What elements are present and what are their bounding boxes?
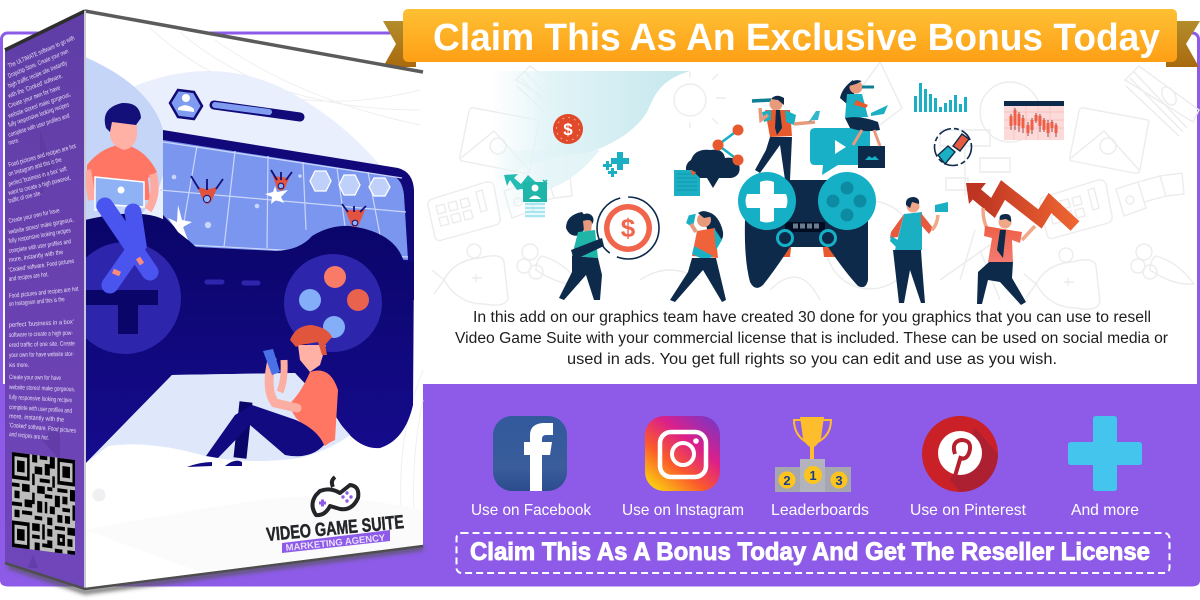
candlestick chart xyxy=(1004,101,1064,140)
center dashes xyxy=(207,282,258,283)
figure: man with megaphone xyxy=(890,197,948,303)
item: Pinterest xyxy=(910,416,1027,519)
label: And more xyxy=(1071,502,1139,519)
icon: profile card with arrow xyxy=(504,174,547,216)
side text: fully responsive looking recipes xyxy=(8,227,71,245)
gamepad illustration xyxy=(738,172,876,288)
progress fill xyxy=(215,105,269,112)
right disc xyxy=(818,172,876,230)
logo subtitle plate xyxy=(282,530,390,553)
side text: complete with user profiles and xyxy=(9,404,73,415)
joystick left xyxy=(778,230,792,246)
laptop man arms xyxy=(87,170,155,210)
right pad circle xyxy=(284,254,382,352)
QR code xyxy=(12,452,75,555)
plus pad xyxy=(85,290,158,334)
side text: perfect 'business in a box' soft xyxy=(8,166,68,188)
ground shadow xyxy=(400,506,416,530)
laptop man legs xyxy=(105,206,150,285)
side text: more, instantly with the xyxy=(9,413,65,424)
heading: Claim This As An Exclusive Bonus Today xyxy=(433,17,1160,59)
chain link icon xyxy=(934,128,972,166)
side text: complete with user profiles and xyxy=(7,112,71,139)
laptop man hair xyxy=(105,103,141,132)
label: Use on Facebook xyxy=(471,502,592,519)
side text: fully responsive looking recipes xyxy=(7,101,70,129)
side text: on Instagram and this is the xyxy=(8,156,63,178)
button coral xyxy=(324,266,346,288)
button blue bottom xyxy=(323,316,345,338)
phone man shirt xyxy=(288,370,338,446)
side text: and recipes are hot. xyxy=(8,271,49,283)
white sparkles xyxy=(168,186,288,240)
illustration: red coin xyxy=(553,114,583,144)
item: Leaderboards: 2 xyxy=(783,473,791,488)
red trend arrow xyxy=(966,183,1075,226)
item: Leaderboards: 1 xyxy=(809,468,817,483)
logo dots xyxy=(341,491,353,503)
dots xyxy=(172,174,302,228)
hexagons xyxy=(310,171,390,196)
side text: with the 'Cooked' software. xyxy=(6,72,64,100)
side text: ies more. xyxy=(9,362,29,369)
side text: Food pictures and recipes are hot xyxy=(8,286,79,300)
body text: In this add on our graphics team have created 30 done for you graphics that you can use to resell xyxy=(473,309,1151,326)
call to action xyxy=(456,533,1170,573)
teal wash lower lobe xyxy=(491,150,600,214)
joystick right xyxy=(820,230,836,246)
figure: woman on video bubble xyxy=(810,80,888,175)
trophy cup xyxy=(800,417,824,468)
figure: man lifting arrow xyxy=(977,208,1035,305)
level hexagon xyxy=(170,90,202,119)
face buttons xyxy=(826,182,866,222)
side text: on Instagram and this is the xyxy=(9,296,65,308)
icon: instagram xyxy=(645,416,720,491)
body text: Video Game Suite with your commercial license that is included. These can be used on social media or xyxy=(455,330,1168,347)
phone man hair xyxy=(290,325,332,355)
figure: man with spyglass xyxy=(752,96,820,180)
orange accents xyxy=(776,240,836,257)
side text: more, instantly with the xyxy=(8,249,64,264)
play triangle xyxy=(835,140,846,154)
phone man arm xyxy=(269,360,297,408)
logo plus xyxy=(319,500,326,506)
side text: website stores! make gorgeous, xyxy=(7,216,74,236)
game screen xyxy=(163,140,408,260)
side text xyxy=(6,35,79,442)
icon: cloud network xyxy=(686,124,744,188)
sitting man on left xyxy=(87,103,157,285)
left blob xyxy=(85,57,166,225)
progress bar xyxy=(214,105,300,117)
side text: fully responsive looking recipes xyxy=(9,394,72,404)
laptop man shirt xyxy=(87,144,157,200)
side text: complete with user profiles and xyxy=(8,238,72,255)
item: Leaderboards: 3 xyxy=(835,473,843,488)
enemy ships xyxy=(191,170,366,227)
light arch xyxy=(134,71,380,219)
podium xyxy=(800,459,825,492)
side text: perfect 'business in a box' xyxy=(9,319,74,329)
button blue left xyxy=(299,289,321,311)
body text: used in ads. You get full rights so you can edit and use as you wish. xyxy=(567,351,1057,368)
phone man head xyxy=(298,345,326,372)
icon: facebook xyxy=(493,416,567,491)
box side face xyxy=(5,12,85,588)
side text: The ULTIMATE software to go with xyxy=(7,35,76,70)
ribbon left tail xyxy=(383,21,416,67)
box top edge side xyxy=(5,11,85,50)
item: And more xyxy=(1068,416,1142,519)
ribbon right tail xyxy=(1166,21,1200,67)
side text: website stores! make gorgeous, xyxy=(7,91,72,120)
icon: dollar target: $ xyxy=(621,213,636,243)
man with phone xyxy=(187,325,338,467)
gamepad dots xyxy=(793,224,819,228)
icon: dollar target xyxy=(597,197,659,259)
dashed box xyxy=(456,533,1170,573)
light pane xyxy=(85,373,350,464)
side text: traffic of one site. xyxy=(8,190,43,205)
avatar xyxy=(178,94,194,112)
teal wash shape behind icons xyxy=(491,71,690,195)
icon: pinterest xyxy=(922,416,998,492)
side text: more. xyxy=(8,137,20,147)
body text xyxy=(455,309,1168,368)
side text: ered traffic of one site. Create xyxy=(9,340,75,349)
product box xyxy=(5,11,423,592)
side text: Create your own for have xyxy=(7,84,62,110)
icon: plus xyxy=(1068,416,1142,491)
image card mountain xyxy=(865,156,879,160)
ribbon banner xyxy=(383,9,1200,67)
side text: Dropship Store. Create your own xyxy=(7,48,70,80)
item: Leaderboards xyxy=(771,417,869,519)
phone xyxy=(263,349,280,375)
box front face xyxy=(85,12,423,588)
call to action text: Claim This As A Bonus Today And Get The Reseller License xyxy=(470,538,1150,566)
side text: Create your own for have xyxy=(8,207,61,225)
item: Instagram xyxy=(622,416,744,519)
side text: 'Cooked' software. Food pictures xyxy=(8,258,75,274)
gamepad body xyxy=(745,180,868,288)
label: Use on Instagram xyxy=(622,502,744,519)
screen grid xyxy=(160,142,408,257)
background doodle pattern xyxy=(428,62,1199,309)
laptop xyxy=(95,177,144,210)
medals xyxy=(804,466,822,484)
laptop man neck and face xyxy=(110,122,137,150)
side text: your own for have website stor- xyxy=(9,351,74,359)
item: Facebook xyxy=(471,416,592,519)
label: Use on Pinterest xyxy=(910,502,1027,519)
plus glyph xyxy=(746,180,788,222)
gamepad light panel xyxy=(785,222,825,232)
logo subtitle: MARKETING AGENCY xyxy=(285,533,386,554)
box vertical corner xyxy=(84,11,86,588)
bar chart icon xyxy=(916,83,966,112)
video bubble xyxy=(810,128,870,175)
ribbon body xyxy=(403,9,1177,62)
purple bottom panel xyxy=(0,384,1200,586)
trophy handles xyxy=(794,420,831,443)
side text: want to create a high powered, xyxy=(7,175,72,197)
logo title: VIDEO GAME SUITE xyxy=(265,512,405,546)
figure: woman with megaphone xyxy=(670,211,726,302)
side text: Food pictures and recipes are hot xyxy=(8,143,77,169)
icon: document xyxy=(674,170,700,196)
front faint arcs xyxy=(150,28,423,530)
controller frame xyxy=(163,130,414,300)
icon: teal plus signs xyxy=(603,152,629,177)
left pad circle xyxy=(86,242,181,354)
illustration: red coin: $ xyxy=(563,120,573,139)
brand logo xyxy=(265,477,405,554)
box top edge front xyxy=(85,11,423,72)
box front artwork xyxy=(86,58,416,553)
side text: and recipes are hot. xyxy=(9,431,49,442)
phone man pants xyxy=(206,405,324,458)
controller lower body xyxy=(85,214,414,464)
box bottom edge xyxy=(5,546,423,589)
side text: high traffic recipe site instantly xyxy=(7,60,69,90)
side text: Create your own for have xyxy=(9,374,61,382)
figure: woman holding magnifier xyxy=(559,212,604,300)
side text: software to create a high pow- xyxy=(9,330,73,339)
phone man back leg xyxy=(240,402,246,458)
plus disc xyxy=(738,172,796,230)
side diamond pattern xyxy=(28,130,60,568)
label: Leaderboards xyxy=(771,502,869,519)
laptop man ankles xyxy=(113,258,142,274)
side text: 'Cooked' software. Food pictures xyxy=(9,422,76,435)
button red xyxy=(347,289,369,311)
box shadow xyxy=(8,548,423,592)
phone man shoes xyxy=(187,461,242,467)
side text: website stores! make gorgeous, xyxy=(8,384,75,393)
logo gamepad xyxy=(312,477,358,515)
image card xyxy=(858,146,885,168)
